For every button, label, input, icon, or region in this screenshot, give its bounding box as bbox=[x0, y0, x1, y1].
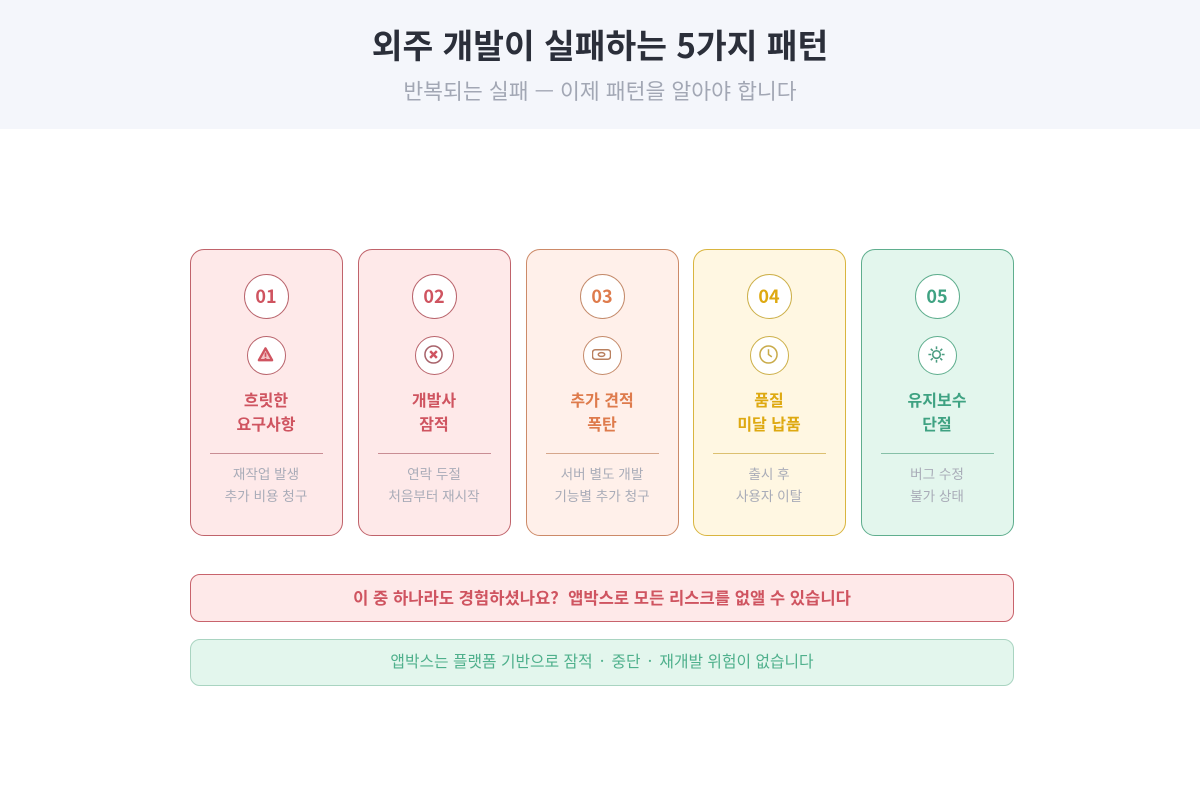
number badge 01 bbox=[244, 274, 288, 318]
header band bbox=[0, 0, 1200, 129]
card title: 미달 납품 bbox=[737, 410, 801, 434]
card description bbox=[910, 463, 964, 505]
card title: 잠적 bbox=[419, 410, 449, 434]
number badge 04 bbox=[746, 274, 792, 318]
callout: green reassurance banner bbox=[190, 639, 1014, 686]
card title bbox=[737, 386, 801, 434]
card title bbox=[237, 386, 295, 434]
callout: green reassurance banner: 앱박스는 플랫폼 기반으로 잠적 · 중단 · 재개발 위험이 없습니다 bbox=[390, 649, 814, 672]
card description: 버그 수정 bbox=[910, 463, 964, 483]
card description: 출시 후 bbox=[748, 463, 790, 483]
card title: 단절 bbox=[922, 410, 952, 434]
number badge 03 bbox=[580, 274, 624, 318]
card description: 추가 비용 청구 bbox=[225, 485, 307, 505]
card description: 불가 상태 bbox=[910, 485, 964, 505]
title: 외주 개발이 실패하는 5가지 패턴 bbox=[372, 19, 828, 68]
icon: x in circle bbox=[414, 336, 454, 374]
panel: card 02 bbox=[358, 249, 511, 536]
number badge 05: 05 bbox=[926, 282, 948, 308]
card description: 사용자 이탈 bbox=[736, 485, 802, 505]
card description bbox=[225, 463, 307, 505]
card description bbox=[554, 463, 650, 505]
card title bbox=[570, 386, 634, 434]
card description: 연락 두절 bbox=[407, 463, 461, 483]
number badge 03: 03 bbox=[591, 282, 613, 308]
icon: banknote bbox=[582, 336, 622, 374]
card title: 추가 견적 bbox=[570, 386, 634, 410]
panel: card 05 bbox=[861, 249, 1014, 536]
card title: 폭탄 bbox=[587, 410, 617, 434]
card title bbox=[412, 386, 456, 434]
number badge 05 bbox=[914, 274, 960, 318]
number badge 02 bbox=[412, 274, 456, 318]
card description: 기능별 추가 청구 bbox=[554, 485, 650, 505]
card description: 재작업 발생 bbox=[233, 463, 299, 483]
icon: clock bbox=[750, 336, 788, 374]
callout: red warning banner: 이 중 하나라도 경험하셨나요? 앱박스로 모든 리스크를 없앨 수 있습니다 bbox=[353, 585, 851, 609]
card title: 흐릿한 bbox=[244, 386, 288, 410]
number badge 01: 01 bbox=[255, 282, 277, 308]
panel: card 04 bbox=[693, 249, 846, 536]
callout: red warning banner bbox=[190, 574, 1014, 622]
card title: 요구사항 bbox=[237, 410, 295, 434]
card title: 개발사 bbox=[412, 386, 456, 410]
card description: 처음부터 재시작 bbox=[388, 485, 480, 505]
number badge 02: 02 bbox=[423, 282, 445, 308]
card description bbox=[736, 463, 802, 505]
card description: 서버 별도 개발 bbox=[561, 463, 643, 483]
card description bbox=[388, 463, 480, 505]
number badge 04: 04 bbox=[758, 282, 780, 308]
card title: 유지보수 bbox=[908, 386, 966, 410]
panel: card 03 bbox=[526, 249, 679, 536]
card title bbox=[908, 386, 966, 434]
card title: 품질 bbox=[754, 386, 784, 410]
icon: gear bbox=[918, 336, 956, 374]
icon: warning triangle bbox=[246, 336, 286, 374]
panel: card 01 bbox=[190, 249, 343, 536]
subtitle: 반복되는 실패 — 이제 패턴을 알아야 합니다 bbox=[403, 75, 797, 106]
